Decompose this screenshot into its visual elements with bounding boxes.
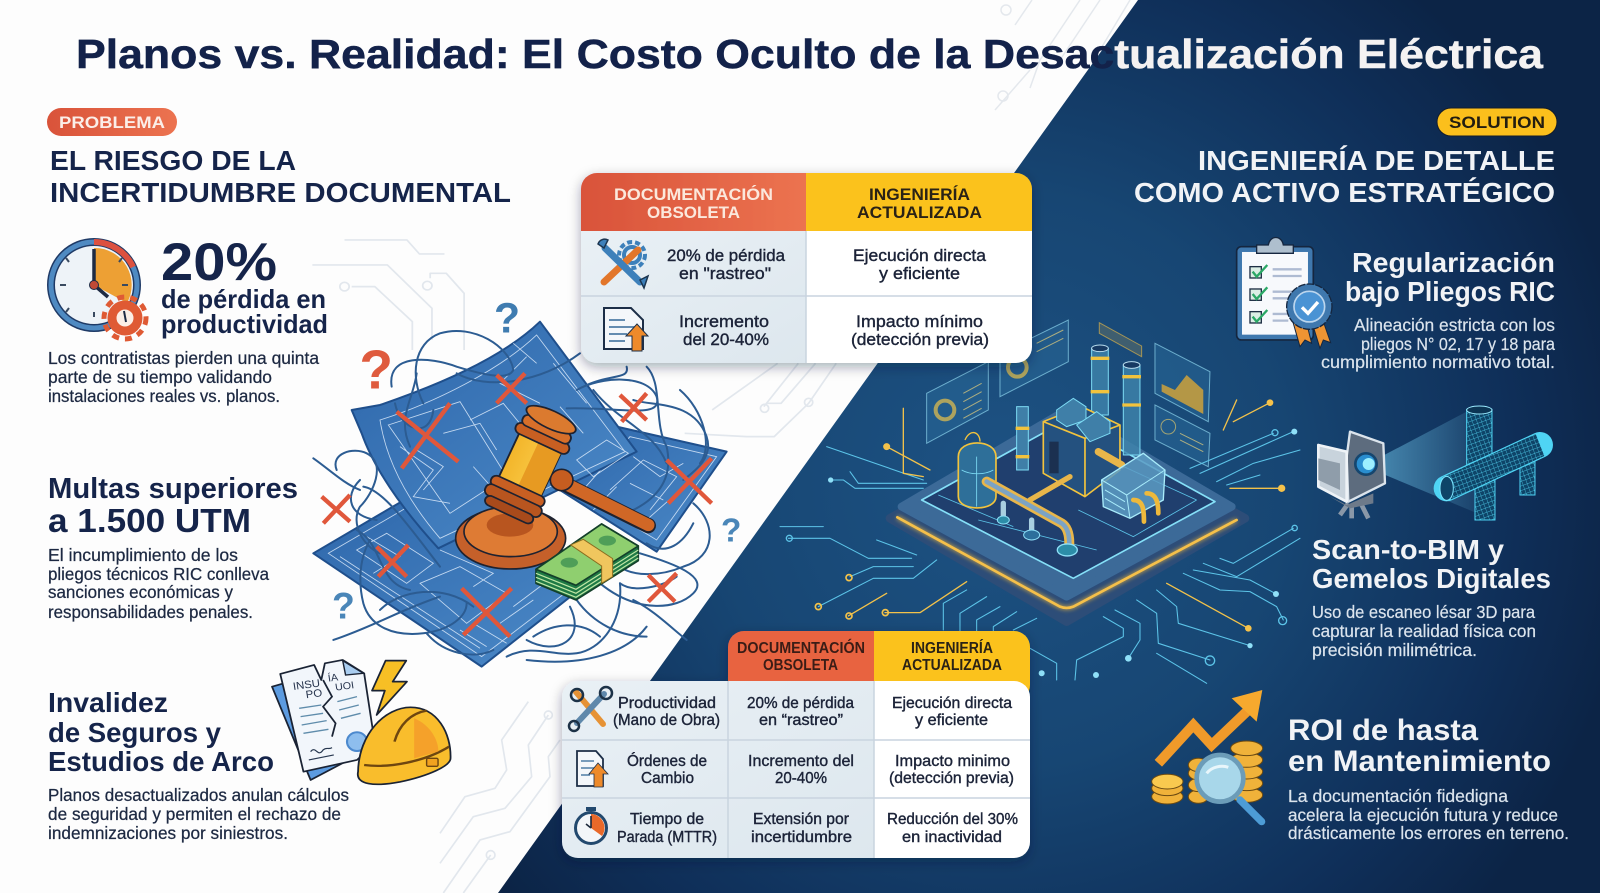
heading: solution: INGENIERÍA DE DETALLE [1198, 145, 1555, 176]
decorative circuit traces on the light side [312, 0, 1130, 893]
icon: torn insurance policy and hard hat: ÍA [327, 671, 339, 685]
row: incremento: Incremento [679, 312, 769, 331]
title: Planos vs. Realidad: El Costo Oculto de la Desac tualización Eléctrica [76, 31, 1544, 77]
heading: problema [50, 145, 511, 208]
comparison table: bottom [562, 631, 1030, 858]
background: dark solution side [498, 0, 1600, 893]
panel: problema column [47, 108, 511, 843]
icon: torn insurance policy and hard hat: INSU [292, 678, 321, 693]
row: ordenes de cambio: Impacto minimo [895, 753, 1010, 770]
question marks [332, 295, 741, 626]
text: regularizacion: pliegos N° 02, 17 y 18 para [1361, 334, 1555, 354]
process block [1043, 398, 1120, 497]
icon: crossed wrench and tool [569, 687, 612, 731]
question marks: ? [721, 513, 741, 550]
text: invalidez [48, 785, 349, 843]
money stack [536, 524, 638, 600]
text: roi [1288, 786, 1569, 843]
icon: clipboard with badge [1237, 237, 1332, 348]
text: multas: sanciones económicas y [48, 582, 233, 602]
text: contratistas: instalaciones reales vs. planos. [48, 386, 280, 406]
header: ingenieria actualizada: ACTUALIZADA [857, 203, 982, 222]
row: ordenes de cambio: Incremento del [748, 753, 854, 770]
upper blueprint sheet [352, 322, 637, 548]
heading: solution: COMO ACTIVO ESTRATÉGICO [1134, 177, 1555, 208]
stat: 20 percent productivity loss: de pérdida en [161, 284, 326, 314]
row: productividad: en “rastreo” [759, 712, 843, 729]
header labels: INGENIERÍA [911, 640, 993, 657]
heading: invalidez: de Seguros y [48, 717, 221, 748]
icon: ROI arrow, coins and magnifier [1152, 690, 1263, 822]
text: roi: acelera la ejecución futura y reduce [1288, 805, 1558, 825]
text: scan-to-bim: Uso de escaneo lésar 3D para [1312, 602, 1535, 622]
header: ingenieria actualizada [806, 173, 1032, 231]
text: roi: drásticamente los errores en terreno. [1288, 823, 1569, 843]
icon: stopwatch [576, 807, 606, 844]
header labels: OBSOLETA [763, 657, 838, 674]
row: rastreo [667, 246, 987, 283]
badge: solution: SOLUTION [1449, 113, 1545, 132]
right blueprint sheet [560, 427, 727, 552]
tank [958, 433, 996, 508]
heading: multas [48, 473, 298, 539]
row: productividad: Productividad [618, 695, 716, 712]
row: ordenes de cambio [627, 751, 1014, 787]
text: contratistas [48, 348, 319, 406]
row: productividad [613, 695, 1012, 729]
gold pipes [987, 452, 1122, 556]
row: tiempo de parada: en inactividad [902, 829, 1002, 846]
text: invalidez: indemnizaciones por siniestros. [48, 823, 288, 843]
badge: solution [1437, 108, 1557, 136]
text: regularizacion [1321, 315, 1555, 372]
row: ordenes de cambio: 20-40% [775, 770, 827, 787]
heading: multas: Multas superiores [48, 473, 298, 505]
heading: regularizacion: bajo Pliegos RIC [1345, 276, 1555, 307]
stat: 20 percent productivity loss [161, 233, 328, 339]
question marks: ? [359, 338, 393, 400]
heading: roi [1288, 714, 1551, 778]
header: documentacion obsoleta [581, 173, 806, 231]
stat: 20 percent productivity loss: productividad [161, 309, 328, 339]
text: contratistas: Los contratistas pierden una quinta [48, 348, 319, 368]
heading: scan-to-bim: Gemelos Digitales [1312, 563, 1551, 594]
icon: wrench and gear [598, 239, 648, 288]
electrical cabinet [1102, 453, 1165, 522]
header labels: ACTUALIZADA [902, 657, 1002, 674]
text: invalidez: Planos desactualizados anulan cálculos [48, 785, 349, 805]
header labels [737, 639, 1002, 674]
row: productividad: y eficiente [915, 712, 988, 729]
heading: multas: a 1.500 UTM [48, 502, 251, 539]
row: tiempo de parada: Tiempo de [630, 811, 704, 828]
gavel base [456, 507, 566, 569]
row: rastreo: y eficiente [879, 264, 960, 283]
heading: scan-to-bim [1312, 534, 1551, 594]
heading: invalidez: Estudios de Arco [48, 746, 274, 777]
badge: problema [47, 108, 177, 136]
header labels: DOCUMENTACIÓN [737, 639, 865, 657]
row: rastreo: en "rastreo" [679, 264, 771, 283]
chimneys [1016, 345, 1141, 470]
heading: regularizacion: Regularización [1352, 247, 1555, 278]
header fills [728, 631, 1030, 701]
row: tiempo de parada: Extensión por [753, 811, 850, 828]
heading: roi: en Mantenimiento [1288, 745, 1551, 778]
text: scan-to-bim [1312, 602, 1536, 660]
row: incremento: del 20-40% [683, 330, 769, 349]
row: tiempo de parada: incertidumbre [751, 829, 852, 846]
heading: problema: EL RIESGO DE LA [50, 145, 296, 176]
row: productividad: (Mano de Obra) [613, 712, 720, 729]
tangled wires [313, 331, 710, 662]
icon: document with up arrow [604, 308, 648, 351]
header: ingenieria actualizada: INGENIERÍA [869, 185, 970, 204]
heading: scan-to-bim: Scan-to-BIM y [1312, 534, 1504, 565]
text: multas [48, 545, 269, 622]
stat: 20 percent productivity loss: 20% [161, 233, 277, 292]
heading: regularizacion [1345, 247, 1555, 307]
icon: laser scanner and wireframe pipes [1318, 406, 1544, 520]
row: productividad: Ejecución directa [892, 695, 1012, 712]
table body [562, 681, 1030, 858]
row: tiempo de parada: Reducción del 30% [887, 811, 1018, 828]
row: incremento [679, 312, 989, 349]
header: documentacion obsoleta: DOCUMENTACIÓN [614, 185, 773, 204]
text: multas: pliegos técnicos RIC conlleva [48, 564, 269, 584]
text: invalidez: de seguridad y permiten el rechazo de [48, 804, 341, 824]
row: ordenes de cambio: (detección previa) [889, 770, 1014, 787]
row: incremento: (detección previa) [851, 330, 989, 349]
icon: torn insurance policy and hard hat: PO [305, 688, 323, 701]
text: scan-to-bim: capturar la realidad física con [1312, 621, 1536, 641]
row: ordenes de cambio: Órdenes de [627, 751, 707, 770]
row: productividad: 20% de pérdida [747, 695, 854, 712]
text: regularizacion: Alineación estricta con los [1354, 315, 1555, 335]
badge: problema: PROBLEMA [59, 113, 165, 132]
panel: solution column [1134, 108, 1569, 843]
question marks: ? [332, 584, 355, 626]
left circuit traces [780, 408, 1037, 640]
floating data panels [927, 320, 1210, 467]
gavel head [479, 399, 583, 527]
row: incremento: Impacto mínimo [856, 312, 983, 331]
heading: invalidez [48, 687, 274, 777]
row: tiempo de parada [617, 811, 1018, 846]
heading: invalidez: Invalidez [48, 687, 168, 718]
header: documentacion obsoleta: OBSOLETA [647, 203, 740, 222]
icon: torn insurance policy and hard hat: UOI [334, 681, 355, 694]
text: scan-to-bim: precisión milimétrica. [1312, 640, 1477, 660]
text: multas: El incumplimiento de los [48, 545, 238, 565]
text: contratistas: parte de su tiempo validando [48, 367, 272, 387]
icon: clock and gear [51, 242, 146, 339]
illustration: blueprints, gavel and money in tangled wires [313, 295, 741, 667]
illustration: digital plant on circuit board [780, 320, 1245, 640]
text: multas: responsabilidades penales. [48, 602, 253, 622]
question marks: ? [494, 295, 520, 343]
heading: roi: ROI de hasta [1288, 714, 1478, 747]
gavel handle [550, 469, 648, 526]
icon: document with arrow [577, 751, 608, 787]
icon: torn insurance policy and hard hat [272, 660, 451, 784]
circuit traces right of platform [1030, 399, 1300, 683]
text: roi: La documentación fidedigna [1288, 786, 1508, 806]
row: rastreo: Ejecución directa [853, 246, 987, 265]
row: tiempo de parada: Parada (MTTR) [617, 829, 717, 846]
row: rastreo: 20% de pérdida [667, 246, 786, 265]
red crosses [322, 373, 712, 637]
lower blueprint sheet [313, 497, 600, 667]
heading: solution [1134, 145, 1555, 208]
heading: problema: INCERTIDUMBRE DOCUMENTAL [50, 177, 511, 208]
platform [890, 410, 1245, 622]
text: regularizacion: cumplimiento normativo total. [1321, 352, 1555, 372]
row: ordenes de cambio: Cambio [641, 770, 694, 787]
comparison table: top [581, 173, 1032, 363]
